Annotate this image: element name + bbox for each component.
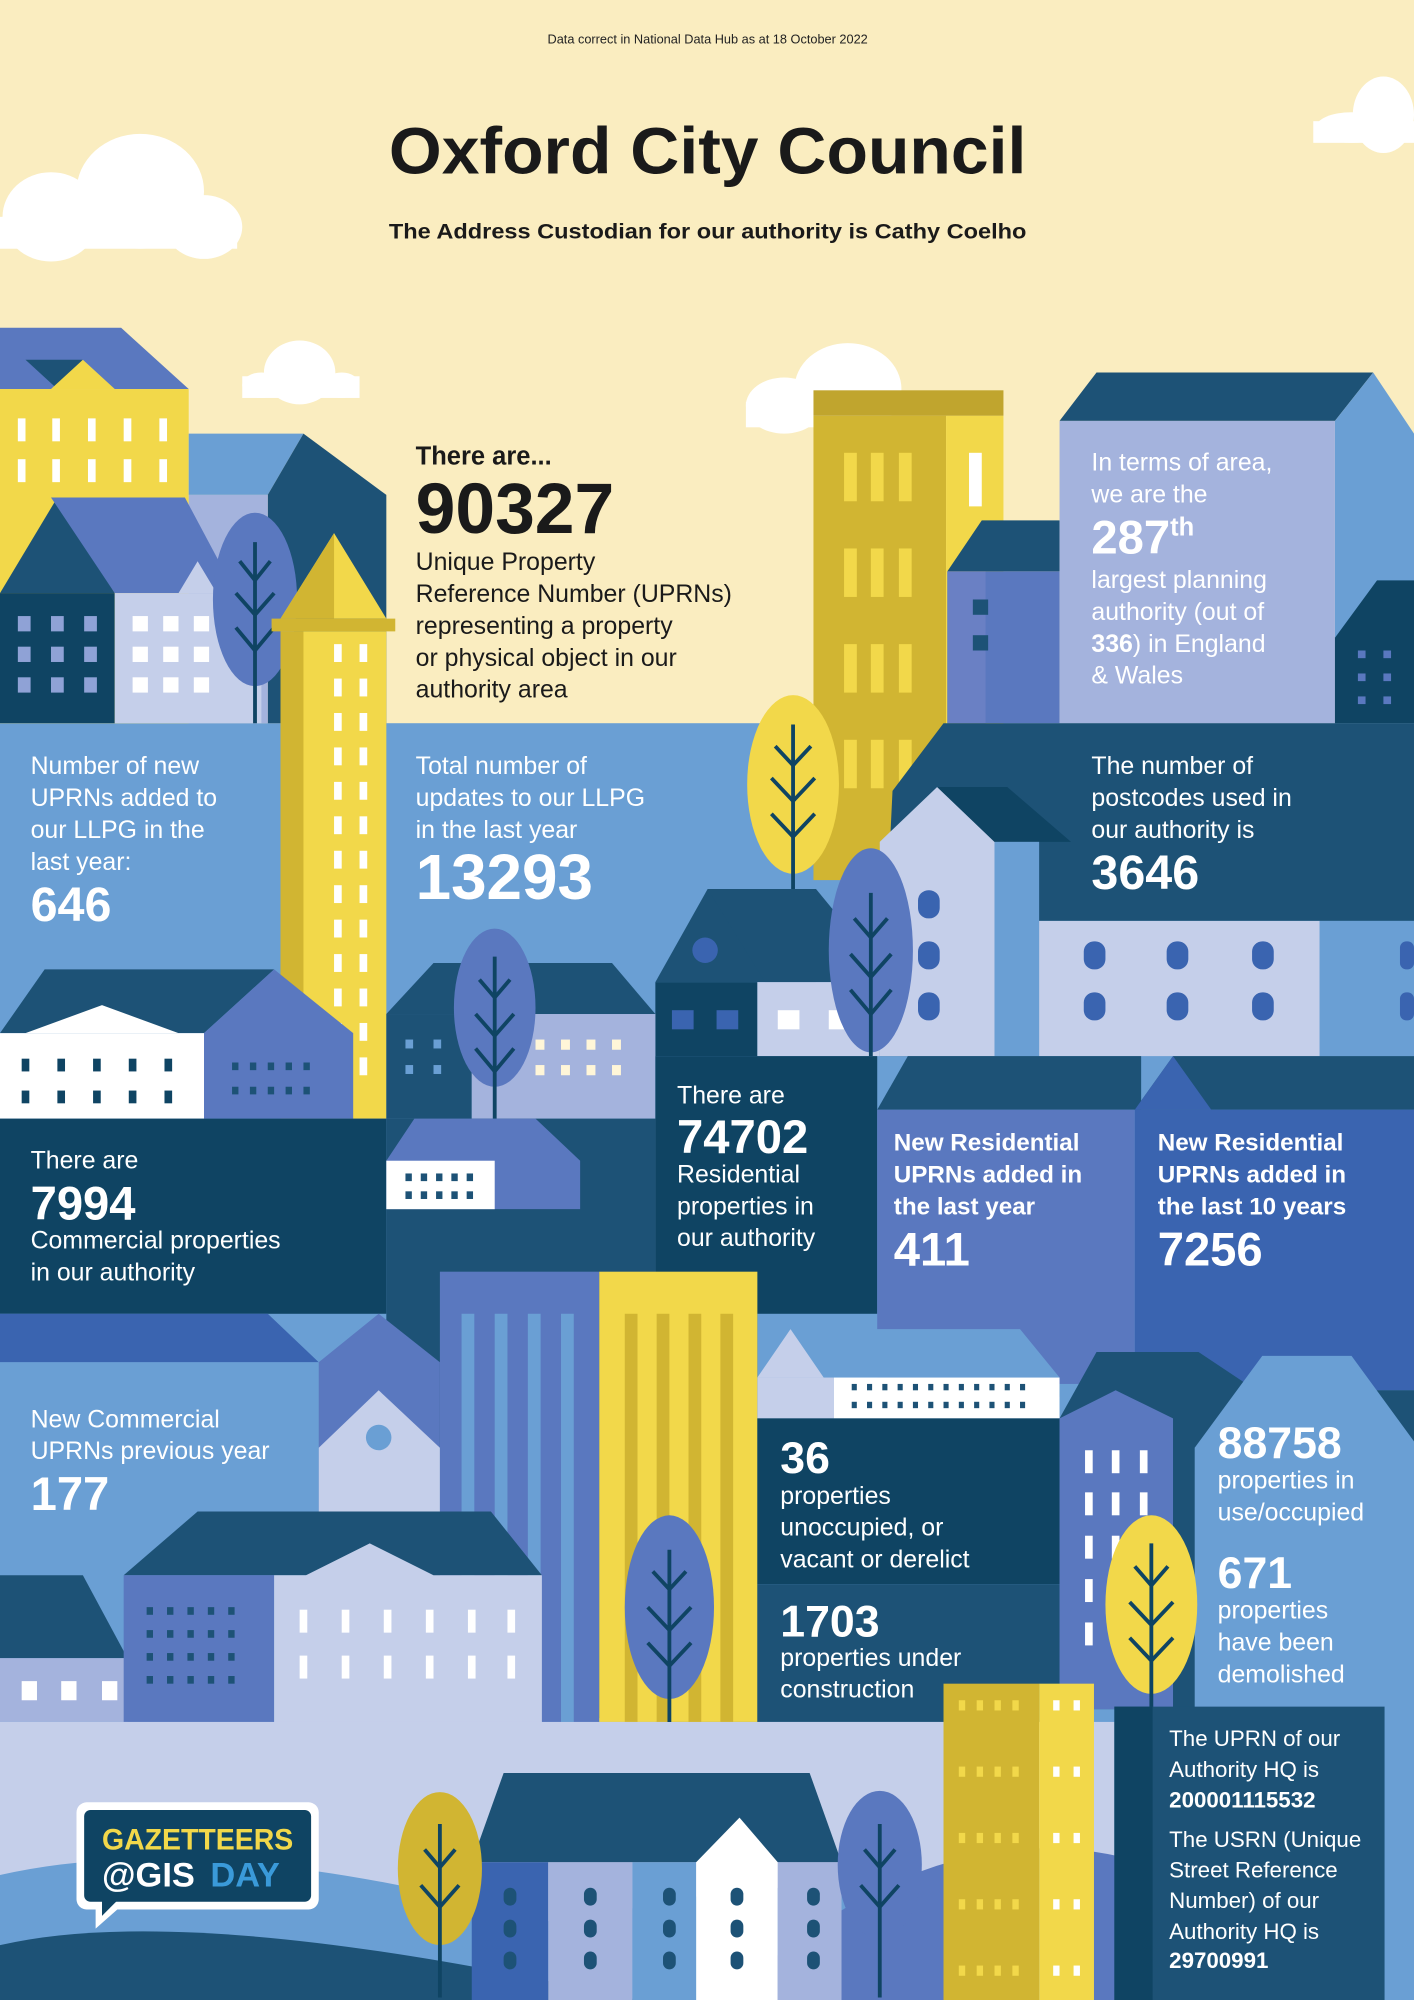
- text: LLPG updates: updates to our LLPG: [416, 784, 645, 812]
- text: new residential 10 years: New Residential: [1158, 1130, 1343, 1157]
- text: postcodes: The number of: [1091, 752, 1253, 780]
- text: occupied and demolished: properties in: [1218, 1467, 1354, 1495]
- text: HQ UPRN and USRN: [1169, 1726, 1361, 1973]
- text: occupied and demolished: have been: [1218, 1629, 1334, 1657]
- tree blue centre: [829, 848, 913, 1056]
- text: under construction: [780, 1597, 961, 1704]
- text: postcodes: our authority is: [1091, 816, 1254, 844]
- postcodes house: [880, 723, 1414, 1056]
- text: new residential last year: New Residential: [894, 1130, 1079, 1157]
- mid band blocks: [0, 1056, 1414, 1722]
- text: LLPG updates: Total number of: [416, 752, 587, 780]
- text: HQ UPRN and USRN: Authority HQ is: [1169, 1757, 1319, 1782]
- text: new residential 10 years: UPRNs added in: [1158, 1161, 1346, 1188]
- text: residential properties: properties in: [677, 1192, 814, 1220]
- text: new residential 10 years: 7256: [1158, 1222, 1263, 1275]
- text: HQ UPRN and USRN: Number) of our: [1169, 1888, 1320, 1913]
- text: occupied and demolished: 671: [1218, 1549, 1292, 1598]
- text: commercial properties: There are: [31, 1146, 138, 1174]
- text: HQ UPRN and USRN: Street Reference: [1169, 1858, 1338, 1883]
- text: area ranking: In terms of area,: [1091, 449, 1272, 477]
- text: new UPRNs last year: UPRNs added to: [31, 784, 217, 812]
- text: LLPG updates: in the last year: [416, 816, 577, 844]
- text: new residential last year: the last year: [894, 1193, 1036, 1220]
- text: total UPRNs: 90327: [416, 469, 614, 549]
- text: unoccupied: unoccupied, or: [780, 1514, 943, 1542]
- text: HQ UPRN and USRN: 200001115532: [1169, 1787, 1316, 1812]
- text: commercial properties: in our authority: [31, 1259, 196, 1287]
- text: postcodes: [1091, 752, 1292, 900]
- dark house centre: [655, 889, 893, 1056]
- small building near tower: [947, 520, 1060, 723]
- text: residential properties: Residential: [677, 1160, 800, 1188]
- text: new residential last year: [894, 1130, 1082, 1275]
- text: new UPRNs last year: [31, 752, 217, 932]
- new commercial building: [0, 1314, 440, 1515]
- text: occupied and demolished: demolished: [1218, 1660, 1345, 1688]
- logo: Gazetteers @GIS Day: DAY: [210, 1856, 280, 1894]
- bottom house centre: [472, 1773, 842, 2000]
- tree left blue: [213, 513, 297, 723]
- text: area ranking: 336) in England: [1091, 630, 1266, 658]
- text: occupied and demolished: use/occupied: [1218, 1498, 1364, 1526]
- bottom landscape: [0, 1722, 1364, 2000]
- yellow tower left: [272, 533, 395, 1119]
- tree yellow centre: [747, 695, 839, 889]
- text: new UPRNs last year: our LLPG in the: [31, 816, 205, 844]
- logo: Gazetteers @GIS Day: @GIS: [102, 1856, 195, 1894]
- text: new commercial: New Commercial: [31, 1405, 220, 1433]
- background blue ground: [0, 723, 1414, 2000]
- text: LLPG updates: [416, 752, 645, 913]
- panel blocks 36 and 1703: [757, 1418, 1060, 1584]
- text: new UPRNs last year: last year:: [31, 848, 131, 876]
- text: residential properties: [677, 1081, 816, 1252]
- text: new residential 10 years: [1158, 1130, 1346, 1275]
- left cluster buildings: [0, 328, 386, 723]
- text: unoccupied: properties: [780, 1482, 891, 1510]
- yellow tower centre: [813, 390, 1003, 880]
- panel: HQ background: [1114, 1707, 1385, 2000]
- text: area ranking: & Wales: [1091, 662, 1183, 690]
- text: area ranking: 287: [1091, 511, 1170, 564]
- text: occupied and demolished: [1218, 1419, 1364, 1688]
- text: commercial properties: Commercial properties: [31, 1227, 281, 1255]
- text: new commercial: [31, 1405, 270, 1520]
- text: HQ UPRN and USRN: 29700991: [1169, 1948, 1268, 1973]
- trees lower: [398, 1515, 1197, 1997]
- text: new residential 10 years: the last 10 years: [1158, 1193, 1346, 1220]
- text: new UPRNs last year: Number of new: [31, 752, 200, 780]
- text: residential properties: 74702: [677, 1110, 808, 1163]
- text: total UPRNs: Unique Property: [416, 548, 596, 576]
- title: Oxford City Council: [389, 114, 1026, 188]
- text: total UPRNs: Reference Number (UPRNs): [416, 580, 732, 608]
- text: commercial properties: 7994: [31, 1176, 136, 1229]
- text: total UPRNs: or physical object in our: [416, 644, 677, 672]
- text: total UPRNs: authority area: [416, 676, 568, 704]
- text: total UPRNs: There are...: [416, 442, 552, 470]
- text: area ranking: th: [1170, 514, 1194, 542]
- text: new residential last year: 411: [894, 1222, 970, 1275]
- text: HQ UPRN and USRN: The USRN (Unique: [1169, 1827, 1361, 1852]
- text: postcodes: 3646: [1091, 846, 1199, 900]
- white long house: [757, 1329, 1060, 1418]
- text: new residential last year: UPRNs added in: [894, 1161, 1082, 1188]
- text: commercial properties: [31, 1146, 281, 1287]
- text: new commercial: 177: [31, 1467, 109, 1520]
- text: total UPRNs: representing a property: [416, 612, 673, 640]
- right lower buildings: [1060, 1352, 1414, 1709]
- date note: Data correct in National Data Hub as at 18 October 2022: [547, 31, 868, 46]
- yellow building bottom right: [944, 1684, 1094, 2000]
- text: total UPRNs: [416, 442, 732, 704]
- text: LLPG updates: 13293: [416, 841, 593, 913]
- houses left low: [0, 963, 655, 1119]
- text: new commercial: UPRNs previous year: [31, 1437, 270, 1465]
- panel: area ranking building: [1060, 372, 1414, 723]
- text: residential properties: There are: [677, 1081, 785, 1109]
- text: area ranking: authority (out of: [1091, 598, 1264, 626]
- text: residential properties: our authority: [677, 1224, 816, 1252]
- text: HQ UPRN and USRN: The UPRN of our: [1169, 1726, 1341, 1751]
- text: occupied and demolished: properties: [1218, 1597, 1328, 1625]
- logo: Gazetteers @GIS Day: GAZETTEERS: [102, 1823, 293, 1856]
- clouds: [0, 77, 1414, 435]
- text: unoccupied: [780, 1434, 970, 1574]
- text: unoccupied: 36: [780, 1434, 830, 1483]
- text: area ranking: largest planning: [1091, 566, 1267, 594]
- text: under construction: 1703: [780, 1597, 880, 1646]
- text: area ranking: [1090, 449, 1272, 690]
- text: under construction: properties under: [780, 1644, 961, 1672]
- logo: Gazetteers @GIS Day: [77, 1802, 319, 1929]
- tree blue left-centre: [454, 929, 536, 1119]
- tall striped buildings: [440, 1272, 757, 1722]
- text: unoccupied: vacant or derelict: [780, 1546, 970, 1574]
- text: postcodes: postcodes used in: [1091, 784, 1292, 812]
- text: occupied and demolished: 88758: [1218, 1419, 1342, 1468]
- subtitle: The Address Custodian for our authority is Cathy Coelho: [389, 219, 1026, 244]
- text: under construction: construction: [780, 1676, 914, 1704]
- text: area ranking: we are the: [1090, 481, 1207, 509]
- text: new UPRNs last year: 646: [31, 878, 111, 932]
- bottom left houses: [0, 1511, 542, 1722]
- text: HQ UPRN and USRN: Authority HQ is: [1169, 1919, 1319, 1944]
